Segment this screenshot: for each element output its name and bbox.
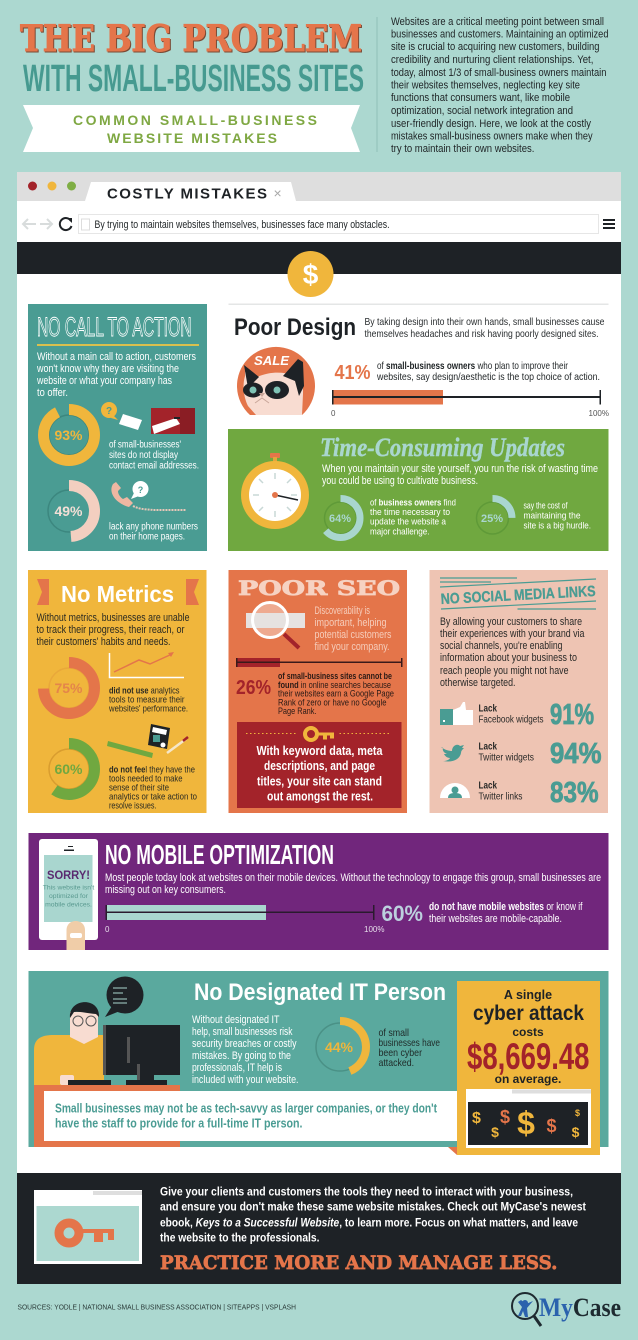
stat text: 64%: major challenge.	[370, 526, 430, 538]
body text	[36, 351, 196, 399]
icon: phone: mobile devices.	[45, 902, 92, 908]
icon: phone: optimized for	[49, 893, 89, 900]
logo: mycase: MyCase	[539, 1293, 621, 1322]
logo: mycase	[512, 1293, 621, 1326]
stat: 26%: 26%	[236, 677, 271, 699]
title	[20, 18, 364, 100]
stat text: 75%: did not use analytics	[109, 686, 180, 696]
body text: reach people you might not have	[440, 665, 568, 677]
stat row: twitter widgets: 94%	[550, 738, 602, 770]
heading: POOR SEO	[238, 576, 400, 600]
callout: keyword data: titles, your site can stand	[257, 774, 382, 788]
icon: ruler, calculator, pencil	[107, 724, 188, 758]
panel: cyber attack cost: $8,669.48	[467, 1036, 590, 1077]
panel: no mobile optimization	[28, 833, 608, 950]
stat text: 44%: attacked.	[378, 1058, 414, 1069]
icon: browser with dollars: $	[546, 1116, 557, 1136]
heading: Time-Consuming Updates	[320, 433, 565, 462]
body text	[314, 605, 392, 653]
bar chart: 60%	[105, 905, 384, 934]
stat text: email: of small-businesses'	[109, 440, 181, 450]
body text: information about your business to	[440, 652, 577, 664]
stat text: 60%: analytics or take action to	[109, 792, 197, 802]
donut: 49%	[44, 486, 94, 536]
donut: 75%	[44, 662, 94, 714]
ribbon subtitle: WEBSITE MISTAKES	[107, 130, 277, 146]
stat text: 64%	[370, 498, 456, 538]
stat text: 44%	[378, 1028, 440, 1069]
icon: grumpy cat	[237, 347, 315, 415]
stat: 26%: Rank of zero or have no Google	[278, 698, 386, 708]
intro text: today, almost 1/3 of small-business owners maintain	[391, 67, 606, 79]
panel: cyber attack cost: costs	[512, 1025, 544, 1039]
stat text: 60%: tools needed to make	[109, 774, 182, 784]
stat text: phone	[109, 522, 198, 542]
stat row: twitter widgets	[441, 738, 602, 770]
intro text	[391, 16, 608, 155]
title: THE BIG PROBLEM	[20, 18, 362, 60]
description	[364, 316, 605, 340]
stat row: twitter links: Lack	[478, 780, 497, 792]
browser window	[17, 172, 621, 1284]
stat text: phone: on their home pages.	[109, 532, 185, 542]
description: security breaches or costly	[192, 1038, 297, 1050]
call to action text	[160, 1184, 586, 1244]
donut: 25%	[473, 498, 512, 538]
description: included with your website.	[192, 1074, 298, 1086]
icon: browser with key	[34, 1190, 142, 1264]
body text	[36, 612, 190, 648]
bar chart: 26%	[236, 658, 402, 667]
heading: Poor Design	[234, 314, 356, 341]
stat text: 60%	[109, 764, 197, 812]
body text: otherwise targeted.	[440, 677, 516, 689]
callout: tech-savvy: have the staff to provide for a full-time IT person.	[55, 1116, 302, 1130]
icon: magnifier	[246, 602, 305, 648]
description	[192, 1014, 298, 1086]
icon: phone	[39, 839, 98, 950]
stat text: 64%: of business owners find	[370, 498, 456, 508]
callout: keyword data: out amongst the rest.	[267, 788, 373, 804]
donut: 93%: 93%	[54, 427, 83, 443]
browser toolbar	[23, 214, 615, 234]
donut: 44%: 44%	[325, 1039, 354, 1055]
browser tab: COSTLY MISTAKES	[107, 186, 267, 202]
stat text: 64%: the time necessary to	[370, 507, 450, 518]
callout: tech-savvy: Small businesses may not be as tech-savvy as larger companies, or they don't	[55, 1102, 438, 1116]
donut: 64%: 64%	[329, 513, 351, 525]
intro text: their websites themselves, neglecting key site	[391, 80, 580, 92]
panel: no metrics	[28, 570, 206, 813]
heading: NO SOCIAL MEDIA LINKS	[440, 583, 596, 608]
panel: no social media links	[430, 570, 608, 813]
body text: Without metrics, businesses are unable	[36, 612, 190, 624]
bar chart: 41%	[331, 390, 609, 418]
icon: browser with dollars: $	[491, 1124, 499, 1140]
stat row: facebook: 91%	[550, 699, 594, 731]
stat text: 44%: of small	[378, 1028, 409, 1039]
callout: keyword data: descriptions, and page	[264, 758, 375, 773]
browser tab: ×	[274, 185, 282, 201]
description: help, small businesses risk	[192, 1026, 293, 1038]
description: missing out on key consumers.	[105, 884, 226, 896]
callout: tech-savvy	[34, 1085, 457, 1147]
heading: No Metrics	[61, 581, 174, 607]
heading: NO CALL TO ACTION	[37, 312, 192, 342]
stat: 60%: 60%	[382, 901, 423, 926]
stat text: 25%: maintaining the	[524, 510, 580, 522]
stat row: facebook: Facebook widgets	[478, 714, 544, 726]
stat text: 25%: say the cost of	[524, 500, 568, 512]
stat text: 44%: businesses have	[378, 1038, 440, 1049]
donut: 93%	[44, 410, 94, 460]
stat text: phone: lack any phone numbers	[109, 522, 198, 532]
description	[105, 872, 601, 896]
panel: cyber attack cost	[448, 981, 600, 1155]
body text: Without a main call to action, customers	[37, 351, 196, 363]
body text: find your company.	[314, 641, 390, 653]
bar chart: 41%: 100%	[589, 409, 609, 418]
title: WITH SMALL-BUSINESS SITES	[23, 58, 364, 100]
donut: 25%: 25%	[481, 513, 503, 525]
browser tab	[85, 182, 296, 202]
stat text: 75%	[108, 686, 188, 714]
icon: browser with dollars: $	[575, 1108, 580, 1118]
intro text: optimization, social network integration and	[391, 105, 573, 117]
body text: website or what your company has	[36, 375, 172, 387]
body text	[440, 616, 584, 689]
stat: 60%	[382, 901, 583, 926]
stat text: 44%: been cyber	[378, 1048, 423, 1059]
stat: 60%: their websites are mobile-capable.	[429, 913, 562, 925]
stat row: facebook: Lack	[478, 704, 497, 714]
intro text: try to maintain their own websites.	[391, 143, 534, 155]
bar chart: 41%: 0	[331, 409, 336, 418]
intro text: functions that consumers want, like mobile	[391, 92, 570, 104]
donut: 60%	[44, 744, 94, 794]
description: professionals, IT help is	[192, 1062, 282, 1074]
heading: No Designated IT Person	[194, 979, 446, 1006]
call to action text: the website to the professionals.	[160, 1230, 320, 1244]
title: THE BIG PROBLEM	[21, 19, 363, 61]
stat: 41%: of small-business owners who plan to improve their	[377, 360, 568, 372]
icon: dollar coin	[288, 251, 334, 297]
panel: time-consuming updates	[228, 429, 608, 551]
stat text: 60%: resolve issues.	[109, 800, 156, 812]
stat text: 75%: websites' performance.	[108, 704, 188, 714]
icon: phone: SORRY!	[47, 868, 90, 882]
stat row: twitter widgets: Lack	[478, 742, 497, 752]
donut: 75%: 75%	[54, 680, 83, 696]
stat: 26%: of small-business sites cannot be	[278, 671, 392, 681]
panel: poor design	[228, 304, 609, 418]
intro text: user-friendly design. Here, we look at the costly	[391, 118, 591, 130]
stat text: email: sites do not display	[109, 450, 178, 461]
intro text: mistakes small-business owners make when they	[391, 130, 593, 142]
icon: browser with dollars: $	[572, 1124, 580, 1140]
stat: 26%: found in online searches because	[278, 680, 391, 690]
intro text: site is crucial to acquiring new customers, building	[391, 41, 600, 53]
icon: dollar coin: $	[303, 259, 319, 290]
icon: line chart	[110, 652, 184, 678]
slogan: PRACTICE MORE AND MANAGE LESS.	[160, 1252, 558, 1274]
illustration: person at computer	[34, 976, 180, 1085]
icon: phone: ?	[138, 485, 143, 495]
stat: 41%: websites, say design/aesthetic is the top choice of action.	[376, 371, 600, 383]
donut: 44%	[314, 1021, 366, 1073]
stat: 60%: do not have mobile websites or know if	[429, 901, 583, 913]
donut: 60%: 60%	[54, 761, 83, 777]
browser toolbar: By trying to maintain websites themselves, businesses face many obstacles.	[94, 219, 390, 231]
description: Without designated IT	[192, 1014, 280, 1026]
body text: potential customers	[314, 629, 392, 641]
stat row: twitter links: 83%	[550, 777, 599, 809]
bar chart: 60%: 0	[105, 925, 110, 934]
panel: no designated it person	[28, 971, 608, 1147]
donut: 64%	[321, 498, 360, 538]
stat text: email: contact email addresses.	[109, 460, 199, 472]
stat: 26%: their websites earn a Google Page	[278, 688, 394, 698]
body text: to offer.	[37, 387, 68, 399]
callout: keyword data: With keyword data, meta	[256, 743, 383, 758]
heading	[37, 579, 199, 607]
stat: 41%: 41%	[334, 362, 371, 384]
body text: to track their progress, their reach, or	[36, 624, 185, 636]
stat row: twitter widgets: Twitter widgets	[478, 752, 534, 764]
panel: no call to action	[28, 304, 207, 551]
bar chart: 60%: 100%	[364, 925, 384, 934]
icon: browser with dollars: $	[472, 1110, 481, 1127]
stat text: 64%: update the website a	[370, 516, 447, 528]
icon: mail	[101, 402, 195, 434]
body text: Discoverability is	[314, 605, 370, 617]
stat text: 75%: tools to measure their	[109, 694, 184, 706]
stat text: 25%: site is a big hurdle.	[524, 520, 591, 532]
callout: keyword data	[237, 722, 402, 808]
ribbon subtitle: COMMON SMALL-BUSINESS	[73, 112, 317, 128]
description	[322, 463, 598, 487]
icon: browser with dollars: $	[517, 1105, 535, 1141]
body text: their experiences with your brand via	[440, 628, 584, 640]
icon: mail: ?	[106, 406, 112, 417]
body text: their customers' habits and needs.	[36, 636, 170, 648]
stat text: 60%: do not feel they have the	[109, 764, 195, 776]
stat: 41%	[334, 360, 600, 384]
stat row: twitter links: Twitter links	[478, 792, 523, 802]
body text: social channels, you're enabling	[440, 640, 562, 652]
heading: NO MOBILE OPTIMIZATION	[105, 839, 334, 870]
call to action text: Give your clients and customers the tools they need to interact with your business,	[160, 1184, 573, 1198]
stat row: twitter links	[440, 777, 599, 809]
panel: cyber attack cost: on average.	[495, 1072, 561, 1086]
ribbon subtitle	[23, 105, 360, 152]
description: mistakes. By going to the	[192, 1050, 291, 1062]
intro text: credibility and nurturing client relationships. Yet,	[391, 54, 593, 66]
description: you could be using to cultivate business.	[322, 475, 478, 487]
icon: browser with dollars: $	[500, 1107, 510, 1127]
icon: stopwatch	[241, 453, 309, 529]
icon: grumpy cat: SALE	[254, 353, 289, 368]
panel: cyber attack cost: cyber attack	[473, 1002, 584, 1025]
body text: By allowing your customers to share	[440, 616, 582, 628]
sources: SOURCES: YODLE | NATIONAL SMALL BUSINESS ASSOCIATION | SITEAPPS | VSPLASH	[18, 1302, 296, 1312]
intro text: Websites are a critical meeting point between small	[391, 16, 604, 28]
icon: key	[305, 728, 334, 740]
stat text: 60%: sense of their site	[109, 782, 169, 794]
call to action text: ebook, Keys to a Successful Website, to learn more. Focus on what matters, and leave	[160, 1216, 578, 1230]
stat text: 25%	[524, 500, 591, 532]
panel: poor seo	[228, 570, 407, 813]
footer band	[17, 1173, 621, 1284]
icon: browser with dollars	[466, 1089, 591, 1148]
body text: important, helping	[314, 617, 386, 629]
stat: 26%	[236, 671, 394, 716]
donut: 49%: 49%	[54, 503, 83, 519]
stat: 26%: Page Rank.	[278, 706, 316, 716]
panel: cyber attack cost: A single	[504, 988, 552, 1002]
icon: phone: This website isn't	[43, 884, 94, 892]
stat text: email	[109, 440, 199, 472]
icon: phone	[111, 481, 186, 510]
stat row: facebook	[440, 699, 594, 731]
body text: won't know why they are visiting the	[36, 363, 179, 375]
